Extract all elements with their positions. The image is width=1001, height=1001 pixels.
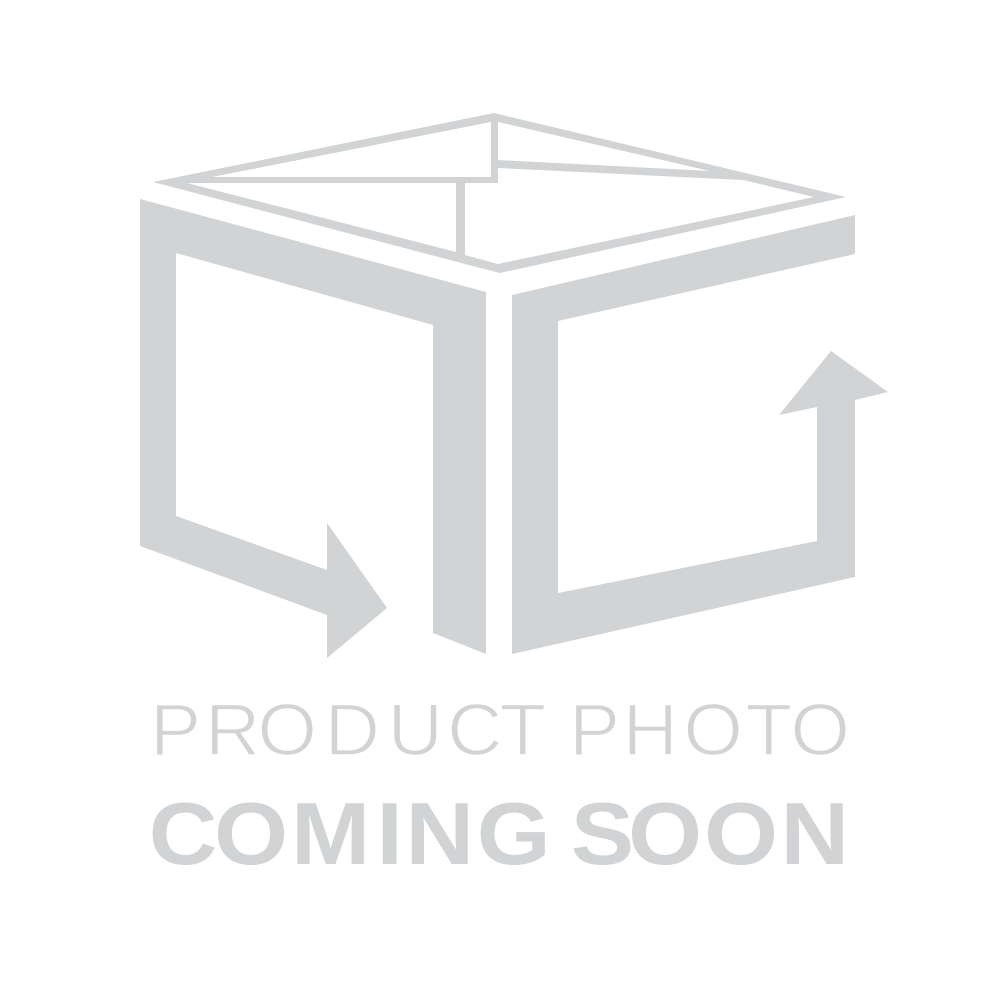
heading: product photo: PRODUCT PHOTO	[150, 689, 850, 771]
box roof outline	[153, 113, 846, 273]
heading: coming soon: COMING SOON	[149, 785, 849, 883]
icon: open box	[140, 113, 888, 658]
right box face with arrow	[512, 215, 888, 654]
left box face with arrow	[140, 199, 486, 658]
